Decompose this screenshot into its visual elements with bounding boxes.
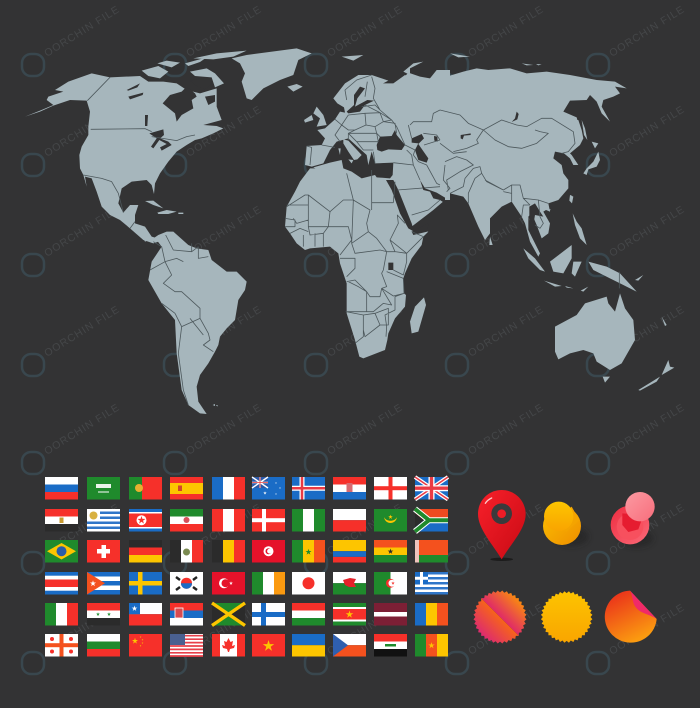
Lake Baikal, Balkhash, Thailand gap and Asian borders — [440, 110, 575, 228]
watermarks: OORCHIN FILE — [184, 3, 264, 60]
seas of Europe and the Middle East — [307, 75, 440, 185]
icon: red map pin — [478, 490, 526, 561]
flag: Sweden — [129, 572, 162, 594]
flag: Costa Rica — [45, 572, 78, 594]
flag: Hungary — [292, 603, 325, 626]
flag: France — [212, 477, 245, 500]
Africa and Arabia — [285, 168, 447, 358]
Japan, Taiwan, Philippines, Sri Lanka — [489, 142, 600, 245]
flag: Iran — [170, 509, 203, 532]
flag: North Korea — [129, 509, 162, 532]
Greenland — [232, 48, 312, 100]
flag: Nigeria — [292, 509, 325, 532]
flag: Australia — [252, 477, 285, 500]
flag: Suriname — [333, 603, 366, 626]
watermarks: OORCHIN FILE — [184, 601, 264, 658]
Russia and northern Asia — [342, 53, 627, 140]
flag: Finland — [252, 603, 285, 626]
watermarks: OORCHIN FILE — [607, 401, 687, 458]
Asian borders — [440, 110, 575, 228]
Madagascar — [410, 297, 426, 333]
watermarks: OORCHIN FILE — [325, 401, 405, 458]
watermarks: OORCHIN FILE — [607, 203, 687, 260]
flag: United Kingdom — [415, 477, 448, 500]
watermarks: OORCHIN FILE — [42, 203, 122, 260]
watermarks: OORCHIN FILE — [607, 601, 687, 658]
flag: Italy — [45, 603, 78, 626]
flag: Uruguay — [87, 509, 120, 532]
watermarks: OORCHIN FILE — [184, 103, 264, 160]
flag: Ukraine — [292, 634, 325, 656]
South America borders — [150, 235, 213, 405]
Persian Gulf — [420, 180, 445, 203]
flag: Iceland — [292, 477, 325, 500]
northern islands — [342, 53, 587, 140]
watermarks: OORCHIN FILE — [607, 103, 687, 160]
North America — [25, 48, 312, 243]
flag: Vietnam — [252, 634, 285, 656]
flag: Cuba — [87, 572, 120, 594]
flag: Poland — [333, 509, 366, 532]
watermarks: OORCHIN FILE — [466, 401, 546, 458]
flag: Denmark — [252, 509, 285, 532]
flag: Belarus — [415, 540, 448, 562]
Britain, Ireland, Iceland — [287, 84, 327, 127]
watermarks: OORCHIN FILE — [607, 501, 687, 558]
flag grid — [45, 477, 448, 656]
Europe — [287, 70, 450, 200]
watermarks: OORCHIN FILE — [42, 401, 122, 458]
flag: South Korea — [170, 572, 203, 594]
flag: Romania — [415, 603, 448, 626]
icon: red push pin — [611, 492, 655, 547]
icon: yellow push pin — [543, 502, 588, 546]
Italy, Sicily, Sardinia — [338, 139, 362, 163]
flag: Croatia — [333, 477, 366, 500]
flag: United States — [170, 634, 203, 656]
watermarks: OORCHIN FILE — [184, 501, 264, 558]
Europe borders — [307, 75, 440, 185]
flag: Chile — [129, 603, 162, 626]
Caribbean islands — [145, 201, 183, 214]
Hudson Bay, straits and Great Lakes — [127, 76, 215, 151]
flag: Jamaica — [212, 603, 245, 626]
flag: Algeria — [374, 572, 407, 594]
flag: Switzerland — [87, 540, 120, 562]
flag: Bulgaria — [87, 634, 120, 656]
Arctic islands — [142, 51, 247, 87]
flag: Senegal — [292, 540, 325, 562]
flag: Syria — [87, 603, 120, 626]
watermarks: OORCHIN FILE — [607, 3, 687, 60]
South America — [140, 232, 247, 414]
watermarks: OORCHIN FILE — [325, 3, 405, 60]
watermarks: OORCHIN FILE — [466, 203, 546, 260]
watermarks: OORCHIN FILE — [42, 601, 122, 658]
Red Sea, Gulf of Aden, Lake Victoria and African borders — [285, 170, 440, 343]
Falkland islands — [213, 404, 218, 407]
New Guinea border — [618, 272, 621, 288]
watermarks: OORCHIN FILE — [466, 601, 546, 658]
watermarks: OORCHIN FILE — [42, 501, 122, 558]
watermarks: OORCHIN FILE — [466, 501, 546, 558]
flag: Saudi Arabia — [87, 477, 120, 500]
flag: Cameroon — [415, 634, 448, 656]
watermarks: OORCHIN FILE — [466, 303, 546, 360]
flag: Latvia — [374, 603, 407, 626]
flag: China — [129, 634, 162, 656]
watermarks: OORCHIN FILE — [325, 303, 405, 360]
flag: Mexico — [170, 540, 203, 562]
flag: Colombia — [333, 540, 366, 562]
Asia south of Russia — [420, 120, 600, 257]
watermarks: OORCHIN FILE — [325, 103, 405, 160]
watermarks: OORCHIN FILE — [607, 303, 687, 360]
watermarks: OORCHIN FILE — [466, 103, 546, 160]
flag: Egypt — [45, 509, 78, 532]
world map — [25, 48, 674, 414]
flag: Canada — [212, 634, 245, 656]
flag: Tunisia — [252, 540, 285, 562]
flag: Wales — [333, 572, 366, 594]
sticker: peeled corner — [605, 591, 657, 643]
watermarks: OORCHIN FILE — [184, 303, 264, 360]
flag: England — [374, 477, 407, 500]
Oceania and Southeast Asia islands — [523, 245, 674, 391]
flag: Germany — [129, 540, 162, 562]
African borders — [285, 170, 440, 343]
flag: Turkey — [212, 572, 245, 594]
watermarks: OORCHIN FILE — [184, 203, 264, 260]
flag: Russia — [45, 477, 78, 500]
flag: Ireland — [252, 572, 285, 594]
flag: Georgia — [45, 634, 78, 656]
watermarks: OORCHIN FILE — [42, 303, 122, 360]
flag: Czech Republic — [333, 634, 366, 656]
flag: Serbia — [170, 603, 203, 626]
flag: South Africa — [415, 509, 448, 532]
badge: pink-orange starburst — [474, 590, 526, 644]
flag: Mauritania — [374, 509, 407, 532]
watermarks: OORCHIN FILE — [325, 601, 405, 658]
pins and badges — [472, 490, 657, 645]
flag: Brazil — [45, 540, 78, 562]
East Asia island details — [569, 195, 573, 203]
flag: Portugal — [129, 477, 162, 500]
watermarks: OORCHIN FILE — [325, 203, 405, 260]
flag: Belgium — [212, 540, 245, 562]
watermarks: OORCHIN FILE — [466, 3, 546, 60]
flag: Peru — [212, 509, 245, 532]
flag: Ghana — [374, 540, 407, 562]
watermarks: OORCHIN FILE — [184, 401, 264, 458]
flag: Greece — [415, 572, 448, 594]
watermarks: OORCHIN FILE — [325, 501, 405, 558]
badge: yellow starburst — [541, 591, 592, 643]
flag: Iraq — [374, 634, 407, 656]
flag: Japan — [292, 572, 325, 594]
watermarks: OORCHIN FILE — [42, 103, 122, 160]
flag: Spain — [170, 477, 203, 500]
watermarks: OORCHIN FILE — [42, 3, 122, 60]
North America borders — [83, 77, 195, 228]
